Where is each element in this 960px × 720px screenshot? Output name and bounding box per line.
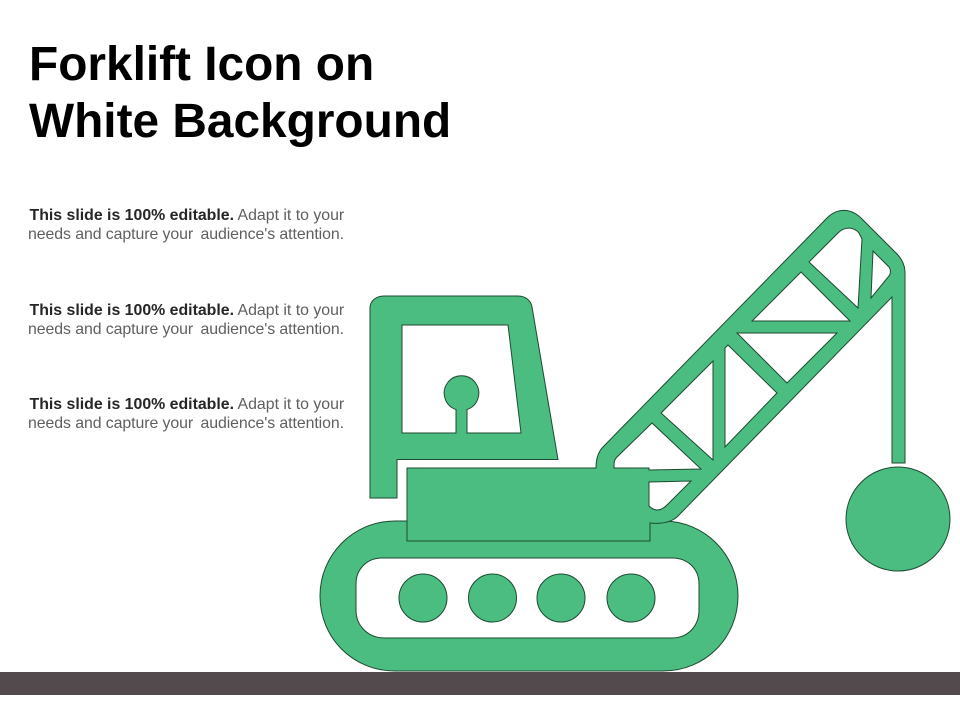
footer bar [0,672,960,695]
body, lattice boom and hoist cable [407,210,905,541]
text block 2: needs and capture your audience's attention. [28,321,344,338]
text block 3 [28,396,344,432]
icon: crane vehicle [320,210,950,671]
text block 3: needs and capture your audience's attention. [28,415,344,432]
title: White Background [29,95,451,148]
text block 1 [28,207,344,243]
text block 2 [28,302,344,338]
title: Forklift Icon on [29,38,374,91]
track wheel 3 [537,574,585,622]
text block 3: This slide is 100% editable. Adapt it to your [30,396,344,413]
crawler track [320,521,738,671]
text block 1: needs and capture your audience's attention. [28,226,344,243]
track wheel 1 [399,574,447,622]
title [29,38,451,148]
text block 2: This slide is 100% editable. Adapt it to your [30,302,344,319]
track wheel 4 [607,574,655,622]
track wheel 2 [468,574,516,622]
text block 1: This slide is 100% editable. Adapt it to your [30,207,344,224]
cab [370,296,558,498]
wrecking ball [846,467,950,571]
